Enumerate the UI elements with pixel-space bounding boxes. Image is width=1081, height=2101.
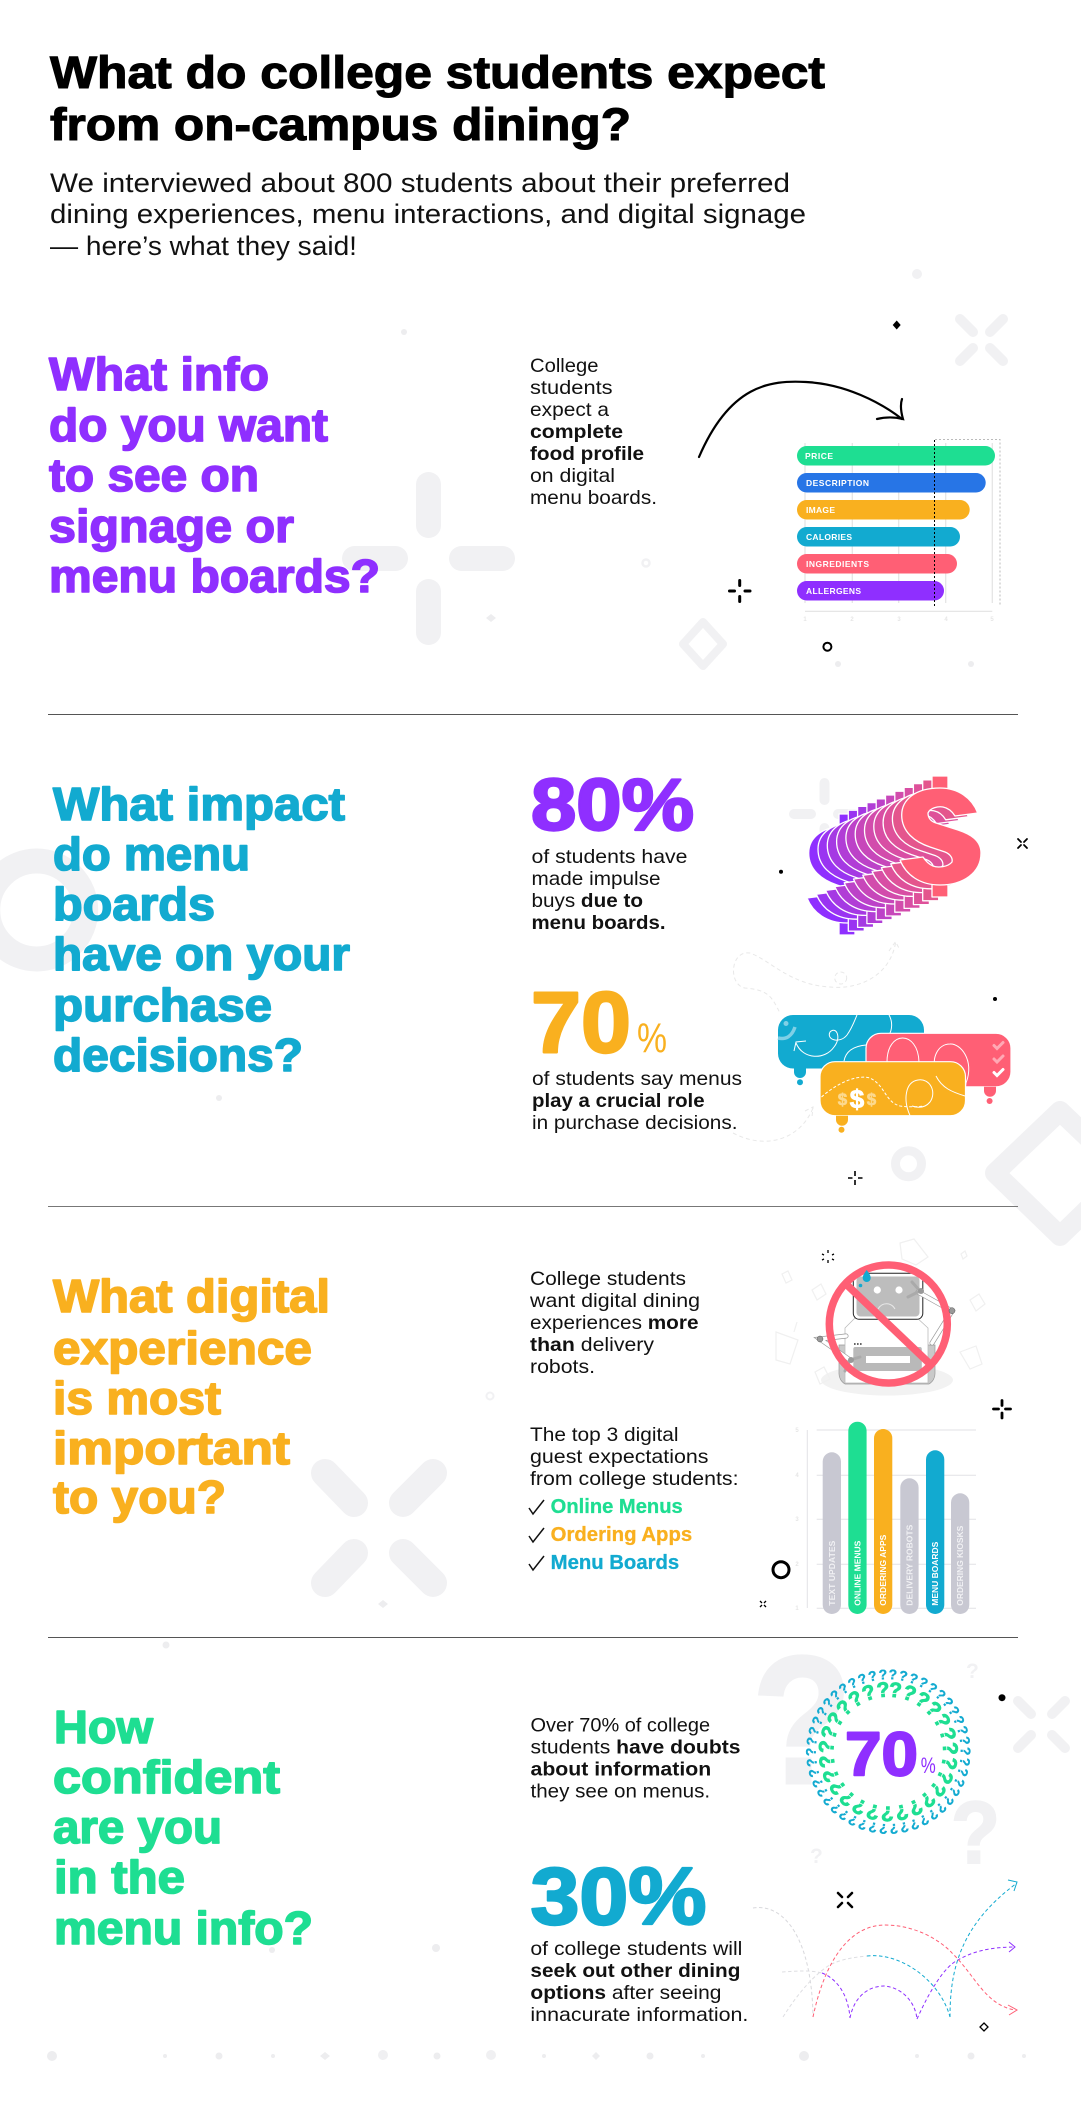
question mark ring: 70 percent: ??????????????????????????? xyxy=(818,1682,958,1822)
heading: how confident: menu info? xyxy=(54,1902,313,1954)
text: complete food profile: complete xyxy=(530,421,623,443)
stat: 30 percent: seek out other dining xyxy=(530,1960,740,1982)
heading: what info: menu boards? xyxy=(49,550,380,602)
bar: ordering kiosks xyxy=(951,1493,969,1614)
bar chart: digital expectations: 5 xyxy=(795,1428,799,1434)
question mark ring: 70 percent: % xyxy=(921,1753,936,1778)
stat: 30 percent: 30% xyxy=(530,1852,706,1942)
intro text: — here’s what they said! xyxy=(50,231,357,261)
text: more than delivery robots xyxy=(529,1268,700,1378)
background question marks: ? xyxy=(752,1618,852,1822)
bar chart: food profile: 2 xyxy=(850,617,854,623)
arrow xyxy=(699,382,903,457)
bar chart: digital expectations: 3 xyxy=(795,1517,799,1523)
heading: what digital: What digital xyxy=(53,1270,330,1322)
checklist xyxy=(529,1496,692,1574)
intro text: We interviewed about 800 students about their preferred xyxy=(50,168,790,198)
text: complete food profile: College xyxy=(530,355,598,377)
black accents: section four xyxy=(838,1694,1006,2031)
text: complete food profile xyxy=(530,355,657,509)
black accents: section one xyxy=(730,320,901,651)
bubble: orange xyxy=(820,1062,966,1133)
title: from on-campus dining? xyxy=(50,99,631,150)
prohibition sign xyxy=(829,1265,947,1383)
question mark ring: 70 percent: ?????????????????????????????????????????????? xyxy=(806,1669,971,1834)
stat: 70 percent: 70 xyxy=(531,975,631,1071)
bar: delivery robots xyxy=(900,1478,919,1614)
stat: 80 percent: made impulse xyxy=(532,868,660,890)
robot arms xyxy=(820,1282,952,1371)
black accents: section two xyxy=(779,839,1027,1185)
heading: what impact: purchase xyxy=(53,979,272,1031)
bar: text updates xyxy=(823,1452,841,1614)
title xyxy=(50,47,825,150)
stat: 30 percent xyxy=(530,1852,748,2026)
bar: ordering kiosks: ORDERING KIOSKS xyxy=(955,1525,965,1606)
stat: 30 percent: innacurate information. xyxy=(530,2004,748,2026)
bar: allergens xyxy=(797,581,944,600)
bar chart: digital expectations: 1 xyxy=(795,1606,799,1612)
title: What do college students expect xyxy=(50,47,825,98)
stat: 80 percent: of students have xyxy=(532,846,688,868)
stat: 80 percent: buys due to xyxy=(532,890,643,912)
heading: what info: do you want xyxy=(49,399,328,451)
bar: ordering apps: ORDERING APPS xyxy=(878,1534,888,1606)
heading: how confident: How xyxy=(54,1701,153,1753)
heading: what impact: have on your xyxy=(53,928,350,980)
heading: what digital: experience xyxy=(53,1322,312,1374)
bar chart: digital expectations: 2 xyxy=(795,1562,799,1568)
bar chart: digital expectations xyxy=(795,1422,976,1614)
bar: menu boards: MENU BOARDS xyxy=(930,1541,940,1606)
text: more than delivery robots: College students xyxy=(530,1268,686,1290)
heading: what impact: boards xyxy=(53,878,215,930)
stat: 70 percent: in purchase decisions. xyxy=(532,1112,738,1134)
heading: how confident: in the xyxy=(54,1851,185,1903)
speech bubbles illustration xyxy=(778,1015,1011,1133)
bar: calories: CALORIES xyxy=(806,532,852,542)
bar chart: food profile: 4 xyxy=(944,617,948,623)
text: more than delivery robots: than delivery xyxy=(530,1334,654,1356)
bar chart: food profile: 3 xyxy=(897,617,901,623)
intro text xyxy=(50,168,806,261)
text: complete food profile: on digital xyxy=(530,465,615,487)
bar: price xyxy=(797,446,995,466)
heading: what digital: is most xyxy=(53,1372,221,1424)
stat: 30 percent: of college students will xyxy=(530,1938,742,1960)
dashed arrows: speech bubbles xyxy=(733,942,900,1141)
bar: ingredients: INGREDIENTS xyxy=(806,559,869,569)
question mark ring: 70 percent: 70 xyxy=(845,1720,918,1790)
checklist: Ordering Apps xyxy=(551,1524,692,1546)
heading: how confident xyxy=(53,1701,313,1954)
bar: image: IMAGE xyxy=(806,505,835,515)
background question marks: ? xyxy=(810,1845,823,1868)
text: more than delivery robots: robots. xyxy=(530,1356,595,1378)
text: top 3 expectations: from college students: xyxy=(530,1468,738,1490)
stat: 70 percent: play a crucial role xyxy=(532,1090,705,1112)
bar: delivery robots: DELIVERY ROBOTS xyxy=(904,1524,914,1606)
icon: dollar sign stack xyxy=(807,776,981,935)
black accents: section three xyxy=(760,1250,1010,1607)
bar: ingredients xyxy=(797,554,957,574)
bar: image xyxy=(797,500,970,520)
background question marks: ? xyxy=(951,1783,1000,1882)
divider xyxy=(48,714,1018,715)
heading: what impact: decisions? xyxy=(53,1029,303,1081)
stat: 80 percent: menu boards. xyxy=(532,912,666,934)
stat: 80 percent xyxy=(531,765,694,934)
background question marks xyxy=(752,1618,1000,1882)
divider xyxy=(48,1637,1018,1638)
stat: 80 percent: 80% xyxy=(531,765,694,846)
text: complete food profile: food profile xyxy=(530,443,644,465)
text: more than delivery robots: want digital dining xyxy=(529,1290,700,1312)
bar: price: PRICE xyxy=(805,451,833,461)
text: complete food profile: expect a xyxy=(530,399,609,421)
bubble: orange: $ xyxy=(850,1084,865,1114)
bar chart: digital expectations: 4 xyxy=(795,1473,799,1479)
bar: text updates: TEXT UPDATES xyxy=(827,1540,837,1606)
stat: 30 percent: options after seeing xyxy=(530,1982,721,2004)
heading: what info xyxy=(49,348,380,602)
heading: what impact xyxy=(53,778,350,1081)
divider xyxy=(48,1206,1018,1207)
text: top 3 expectations: guest expectations xyxy=(530,1446,709,1468)
bar: menu boards xyxy=(926,1450,944,1614)
bubble: orange: $ xyxy=(838,1090,848,1109)
heading: what impact: What impact xyxy=(53,778,345,830)
text: complete food profile: menu boards. xyxy=(530,487,657,509)
heading: what impact: do menu xyxy=(53,828,250,880)
bar: allergens: ALLERGENS xyxy=(806,586,861,596)
text: more than delivery robots: experiences more xyxy=(530,1312,699,1334)
text: have doubts: they see on menus. xyxy=(530,1781,710,1803)
bar chart: food profile xyxy=(797,440,1000,623)
faint food icons xyxy=(776,1239,985,1384)
bar: online menus xyxy=(848,1422,867,1614)
robot base xyxy=(839,1345,935,1384)
stat: 70 percent: % xyxy=(637,1015,667,1062)
intro text: dining experiences, menu interactions, and digital signage xyxy=(50,199,806,229)
bubble: pink xyxy=(866,1033,1011,1104)
heading: how confident: confident xyxy=(53,1751,280,1803)
bubble: blue xyxy=(778,1015,924,1085)
robot screen xyxy=(853,1273,923,1319)
text: top 3 expectations: The top 3 digital xyxy=(530,1424,678,1446)
icon: no robots xyxy=(776,1239,985,1396)
text: top 3 expectations xyxy=(530,1424,738,1490)
bubble: orange: $ xyxy=(867,1090,877,1109)
heading: what digital xyxy=(53,1270,330,1523)
stat: 70 percent xyxy=(531,975,742,1134)
heading: what info: What info xyxy=(49,348,269,400)
heading: how confident: are you xyxy=(53,1801,222,1853)
text: have doubts: about information xyxy=(530,1759,711,1781)
heading: what digital: to you? xyxy=(53,1471,226,1523)
text: have doubts: Over 70% of college xyxy=(530,1715,710,1737)
bar: description xyxy=(797,473,986,492)
text: have doubts xyxy=(530,1715,741,1803)
text: complete food profile: students xyxy=(530,377,613,399)
bar: ordering apps xyxy=(874,1429,892,1614)
dashed arrows: alternative options xyxy=(753,1880,1017,2019)
text: have doubts: students have doubts xyxy=(530,1737,741,1759)
bar: description: DESCRIPTION xyxy=(806,478,869,488)
heading: what info: to see on xyxy=(49,449,259,501)
bar chart: food profile: 1 xyxy=(803,617,807,623)
checklist: Online Menus xyxy=(551,1496,683,1518)
stat: 70 percent: of students say menus xyxy=(532,1068,742,1090)
heading: what info: signage or xyxy=(49,500,294,552)
checklist: Menu Boards xyxy=(551,1552,679,1574)
bar chart: food profile: 5 xyxy=(990,617,994,623)
bar: calories xyxy=(797,527,960,546)
background question marks: ? xyxy=(966,1660,979,1683)
bar: online menus: ONLINE MENUS xyxy=(852,1540,862,1606)
heading: what digital: important xyxy=(53,1422,290,1474)
